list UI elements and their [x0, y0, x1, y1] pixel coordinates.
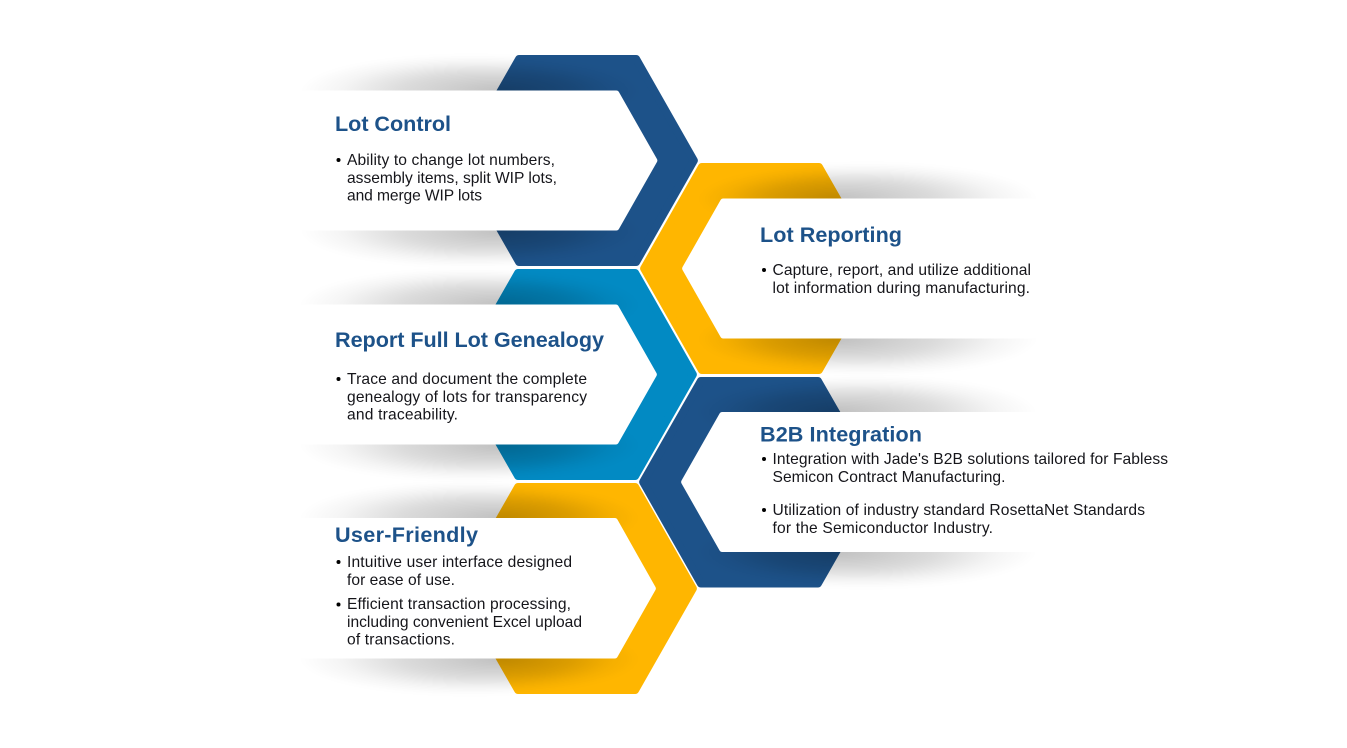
top shadow	[300, 55, 640, 127]
bottom shadow	[300, 195, 640, 267]
bullet list: Efficient transaction processing,	[347, 596, 571, 613]
panel: Lot Reporting	[644, 163, 1042, 375]
white card	[684, 415, 1041, 549]
top shadow	[697, 376, 1037, 448]
bottom shadow	[299, 409, 639, 481]
white card	[295, 521, 653, 656]
bullet list: lot information during manufacturing.	[772, 280, 1030, 297]
bullet list: Ability to change lot numbers,	[347, 152, 555, 169]
bullet list: of transactions.	[347, 632, 455, 648]
heading: Report Full Lot Genealogy	[335, 327, 604, 352]
white card	[295, 94, 654, 228]
panel: B2B Integration	[643, 376, 1168, 588]
panel: User-Friendly	[295, 482, 693, 695]
bottom shadow	[697, 516, 1037, 588]
top shadow	[299, 269, 639, 341]
bullet list: assembly items, split WIP lots,	[347, 170, 557, 187]
bullet list: genealogy of lots for transparency	[347, 389, 587, 406]
bullet list: for the Semiconductor Industry.	[772, 520, 993, 537]
bullet list	[336, 371, 587, 424]
blue hexagon	[460, 273, 693, 476]
bullet list: and merge WIP lots	[347, 188, 482, 204]
bullet list: and traceability.	[347, 406, 458, 424]
navy hexagon	[643, 381, 876, 584]
bullet list	[336, 554, 582, 648]
white card	[685, 202, 1042, 336]
bullet list: Utilization of industry standard RosettaNet Standards	[772, 502, 1145, 519]
heading: User-Friendly	[335, 522, 478, 547]
bullet list: Integration with Jade's B2B solutions tailored for Fabless	[772, 451, 1168, 468]
bottom shadow	[299, 623, 639, 695]
panel: Report Full Lot Genealogy	[295, 269, 693, 481]
bullet list: Capture, report, and utilize additional	[772, 262, 1031, 279]
heading: Lot Reporting	[760, 222, 902, 247]
bullet list: Trace and document the complete	[347, 371, 587, 388]
bullet list: including convenient Excel upload	[347, 614, 582, 631]
top shadow	[698, 163, 1038, 235]
bottom shadow	[698, 303, 1038, 375]
bullet list	[762, 451, 1168, 537]
heading: Lot Control	[335, 111, 451, 136]
bullet list: Intuitive user interface designed	[347, 554, 572, 571]
white card	[295, 308, 654, 442]
navy hexagon	[461, 59, 694, 262]
bullet list	[762, 262, 1031, 297]
heading: B2B Integration	[760, 422, 922, 446]
bullet list: Semicon Contract Manufacturing.	[772, 469, 1006, 486]
yellow hexagon	[460, 487, 693, 690]
top shadow	[299, 482, 639, 554]
yellow hexagon	[644, 167, 877, 370]
bullet list: for ease of use.	[347, 572, 455, 589]
bullet list	[336, 152, 557, 204]
panel: Lot Control	[295, 55, 694, 267]
